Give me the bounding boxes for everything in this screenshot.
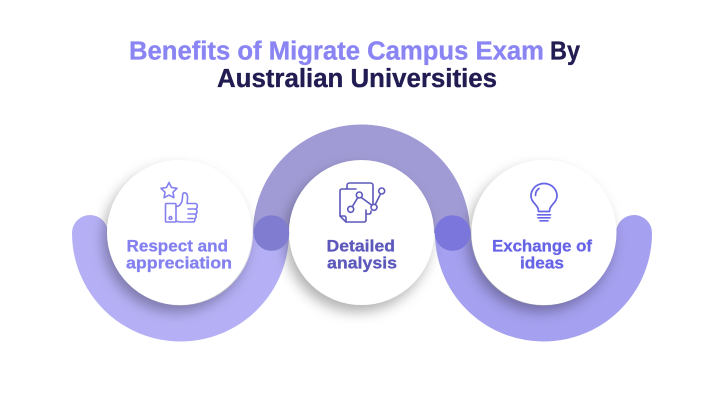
label — [126, 236, 232, 272]
label: Detailed — [326, 236, 395, 256]
arc: middle upper — [271, 142, 452, 233]
panel: exchange of ideas — [472, 160, 616, 305]
icon: thumbs up with star — [161, 182, 197, 222]
overlap disc: left — [254, 215, 289, 251]
panel: respect and appreciation — [107, 160, 252, 305]
overlap disc: right — [435, 215, 470, 251]
label: appreciation — [126, 254, 232, 272]
label: ideas — [520, 254, 564, 272]
title: Benefits of Migrate Campus Exam — [129, 38, 544, 66]
arc: right lower — [453, 233, 634, 324]
label: Exchange of — [492, 236, 592, 256]
title: By — [550, 38, 581, 66]
panel: detailed analysis — [289, 160, 434, 305]
arc: left lower — [90, 233, 271, 323]
icon: analysis chart on pages — [340, 183, 385, 222]
icon: light bulb — [531, 184, 557, 221]
label — [326, 236, 397, 272]
label: analysis — [327, 254, 397, 272]
title — [129, 38, 581, 93]
label: Respect and — [126, 236, 228, 256]
title: Australian Universities — [217, 65, 497, 93]
label — [492, 236, 592, 272]
